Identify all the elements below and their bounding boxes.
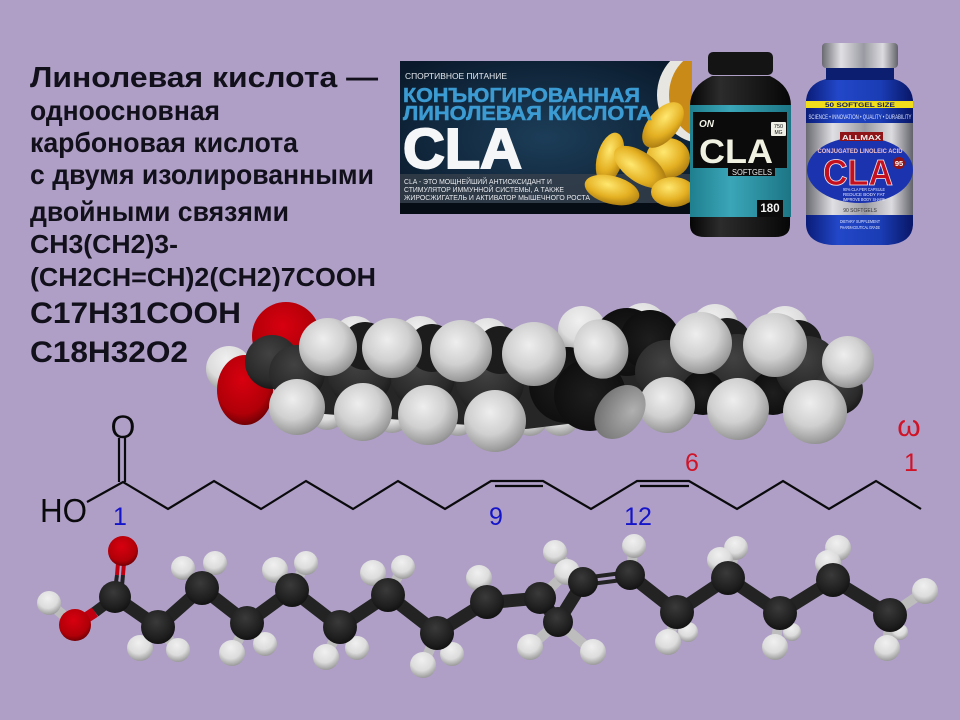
carbonyl and hydroxyl bonds — [75, 551, 125, 625]
carbon atoms — [99, 560, 907, 650]
count box: 180 — [760, 203, 780, 215]
bottle: Allmax CLA — [806, 43, 913, 245]
banner title: КОНЪЮГИРОВАННАЯ — [403, 85, 640, 107]
Allmax logo: ALLMAX — [842, 133, 881, 142]
description — [30, 95, 374, 227]
bottle: Allmax CLA: SCIENCE • INNOVATION • QUALITY • DURABILITY — [808, 114, 912, 121]
bottle small print — [840, 187, 885, 230]
banner caption — [404, 177, 590, 202]
structural formula: (CH2CH=CH)2(CH2)7COOH — [30, 262, 376, 292]
strength badge: 95 — [895, 159, 903, 168]
blue carbon numbers: 12 — [624, 503, 652, 531]
ball-and-stick molecular model — [37, 534, 938, 678]
banner CLA: CLA — [403, 117, 522, 181]
shaded hydrogen — [584, 375, 656, 449]
carbon bonds — [115, 572, 890, 633]
molecular formulas: C17H31COOH — [30, 297, 241, 330]
molecular formulas: C18H32O2 — [30, 336, 188, 369]
bowl with capsules — [584, 61, 692, 207]
hydroxyl label: HO — [40, 492, 87, 529]
product name: CONJUGATED LINOLEIC ACID — [818, 148, 903, 155]
Allmax logo — [840, 132, 883, 142]
description: двойными связями — [30, 196, 289, 227]
space-filling molecular model — [206, 302, 874, 452]
supplement banner — [400, 61, 692, 214]
description: с двумя изолированными — [30, 159, 374, 190]
oxygen label: O — [111, 409, 135, 445]
red omega numbers — [685, 410, 921, 477]
skeletal formula — [40, 409, 921, 531]
bottle: Allmax CLA: 50 SOFTGEL SIZE — [825, 102, 896, 109]
red omega numbers: ω — [897, 410, 921, 443]
hydrogen bonds — [49, 546, 925, 665]
front hydrogens — [269, 312, 874, 452]
ON logo: ON — [699, 119, 715, 130]
blue carbon numbers: 9 — [489, 503, 503, 531]
heading: Линолевая кислота — — [30, 62, 378, 94]
banner title: ЛИНОЛЕВАЯ КИСЛОТА — [403, 103, 652, 125]
bottle small print: PHARMACEUTICAL GRADE — [840, 225, 880, 230]
CLA label: CLA — [699, 133, 773, 171]
bottle small print: DIETARY SUPPLEMENT — [840, 219, 880, 224]
molecular formulas — [30, 297, 241, 369]
bottle: ON CLA softgels — [690, 52, 791, 237]
banner label: СПОРТИВНОЕ ПИТАНИЕ — [405, 71, 507, 81]
description: одноосновная — [30, 95, 220, 126]
bottle small print: REDUCE BODY FAT — [843, 192, 885, 197]
carbon chain — [87, 438, 921, 509]
dose tag: MG — [774, 130, 783, 136]
dose tag — [771, 122, 786, 136]
count box — [757, 200, 783, 217]
oxygen atoms — [59, 536, 138, 641]
softgels label: SOFTGELS — [732, 168, 772, 177]
red omega numbers: 1 — [904, 449, 918, 477]
description: карбоновая кислота — [30, 127, 299, 158]
CLA mark: CLA — [823, 152, 893, 193]
text block: definition and formulas — [30, 62, 378, 369]
structural formula — [30, 229, 376, 292]
oxygen and hydroxyl atoms — [206, 302, 320, 425]
structural formula: CH3(CH2)3- — [30, 229, 178, 259]
banner caption: ЖИРОСЖИГАТЕЛЬ И АКТИВАТОР МЫШЕЧНОГО РОСТА — [404, 193, 590, 202]
dose tag: 750 — [774, 124, 783, 130]
red omega numbers: 6 — [685, 449, 699, 477]
carbon backbone — [245, 308, 863, 431]
bottle small print: 90 SOFTGELS — [843, 208, 877, 214]
strength badge — [893, 157, 905, 169]
bottle small print: 90% CLA PER CAPSULE — [843, 187, 885, 192]
rear hydrogens — [309, 303, 809, 436]
blue carbon numbers: 1 — [113, 503, 127, 531]
banner caption: CLA - ЭТО МОЩНЕЙШИЙ АНТИОКСИДАНТ И — [404, 177, 552, 186]
bottle small print: IMPROVE BODY SHAPE — [843, 197, 885, 202]
blue carbon numbers — [113, 503, 652, 531]
hydrogen atoms — [37, 534, 938, 678]
banner title — [402, 88, 652, 120]
banner caption: СТИМУЛЯТОР ИММУННОЙ СИСТЕМЫ, А ТАКЖЕ — [404, 185, 564, 194]
